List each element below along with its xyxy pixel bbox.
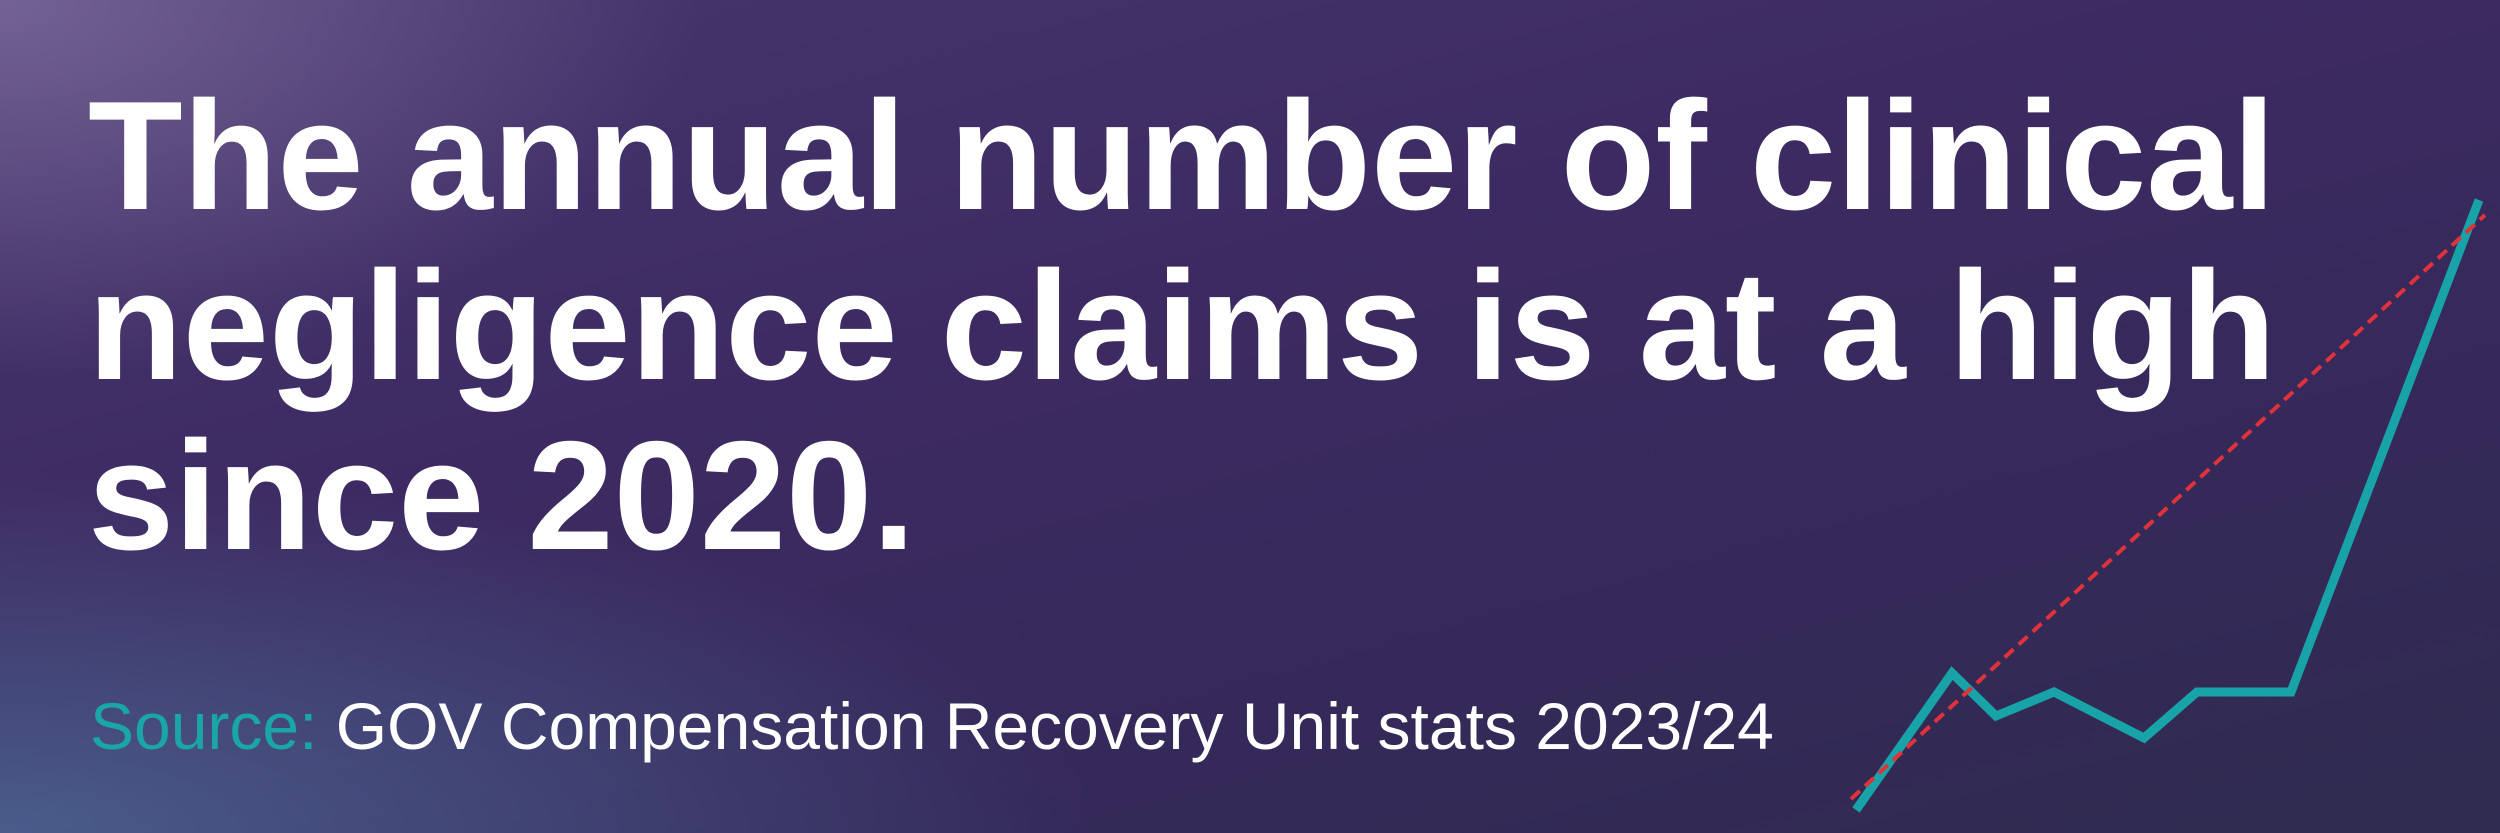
title: since 2020. bbox=[88, 409, 915, 582]
source text: Source: GOV Compensation Recovery Unit stats 2023/24 bbox=[90, 689, 1774, 763]
title: The annual number of clinical bbox=[88, 69, 2276, 242]
title: negligence claims is at a high bbox=[88, 239, 2276, 412]
chart: red dashed trend line bbox=[1851, 215, 2485, 799]
title bbox=[88, 69, 2276, 582]
chart: teal data line bbox=[1856, 200, 2479, 810]
